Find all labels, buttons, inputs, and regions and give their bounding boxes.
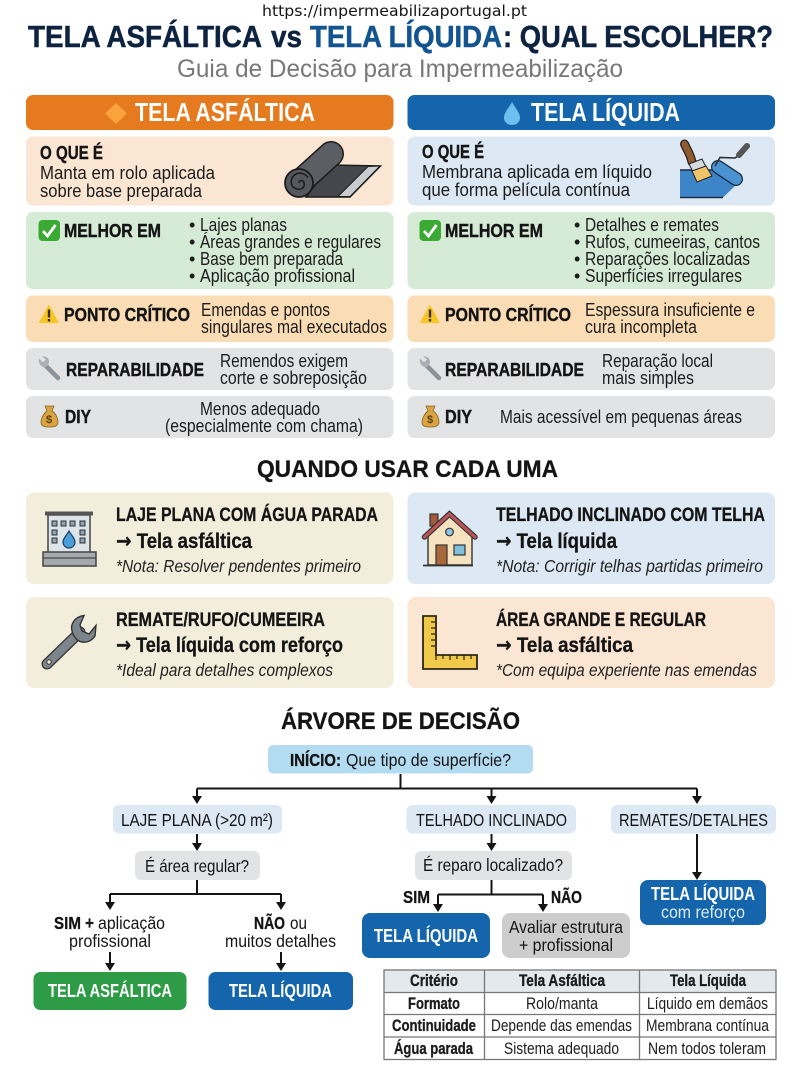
source url: https://impermeabilizaportugal.pt	[262, 2, 527, 20]
label: sim: SIM	[403, 887, 430, 907]
icon: warning	[38, 304, 59, 323]
row: melhor em: Superfícies irregulares	[585, 266, 742, 286]
icon: large wrench	[47, 616, 96, 664]
card: área grande: → Tela asfáltica	[496, 633, 633, 657]
row: melhor em: •	[574, 215, 580, 235]
table header: Tela Líquida	[670, 972, 747, 990]
row: ponto crítico: PONTO CRÍTICO	[445, 304, 571, 325]
title: : QUAL ESCOLHER?	[503, 20, 773, 54]
row: o que é: que forma película contínua	[422, 180, 631, 200]
result: tela asfáltica: TELA ASFÁLTICA	[48, 980, 172, 1001]
arrow: sim to tela asfáltica	[105, 952, 115, 971]
label: sim aplicação profissional: aplicação	[98, 913, 165, 933]
card: remate	[26, 597, 394, 688]
row: o que é: sobre base preparada	[40, 181, 203, 201]
icon: house	[423, 514, 475, 566]
title	[28, 19, 773, 54]
row: melhor em: Base bem preparada	[200, 249, 344, 269]
result: tela líquida repair	[362, 913, 490, 958]
arrow: remates to result	[692, 834, 702, 880]
node: é reparo localizado	[415, 851, 572, 880]
row: diy: (especialmente com chama)	[165, 416, 363, 436]
result: tela líquida com reforço	[640, 880, 766, 925]
card: laje plana: LAJE PLANA COM ÁGUA PARADA	[116, 503, 378, 526]
arrow: telhado to question	[486, 834, 496, 851]
arrow: laje to question	[192, 834, 202, 851]
result: avaliar estrutura: Avaliar estrutura	[509, 917, 623, 937]
row: ponto crítico	[26, 296, 394, 342]
row: reparabilidade	[408, 348, 775, 390]
card: remate: REMATE/RUFO/CUMEEIRA	[116, 609, 325, 631]
icon: building with water drop	[43, 512, 96, 566]
row: ponto crítico	[408, 296, 775, 342]
card: área grande	[408, 597, 775, 688]
card: remate: *Ideal para detalhes complexos	[116, 660, 333, 680]
icon: check	[420, 220, 441, 241]
card: área grande: *Com equipa experiente nas emendas	[496, 660, 757, 680]
row: o que é: O QUE É	[422, 141, 484, 162]
row: ponto crítico: Espessura insuficiente e	[585, 300, 755, 320]
node: início: Que tipo de superfície?	[346, 750, 511, 770]
icon: money bag: $	[427, 414, 433, 426]
row: diy: DIY	[65, 406, 92, 427]
header: tela líquida	[408, 95, 775, 130]
node: início: INÍCIO:	[290, 749, 341, 770]
node: remates: REMATES/DETALHES	[619, 810, 768, 830]
card: área grande: ÁREA GRANDE E REGULAR	[496, 608, 706, 631]
node: telhado inclinado	[406, 805, 576, 834]
row: reparabilidade: corte e sobreposição	[220, 368, 367, 388]
row: melhor em: Lajes planas	[200, 215, 287, 235]
node: início	[268, 745, 533, 774]
row: melhor em: •	[574, 266, 580, 286]
node: laje plana: LAJE PLANA (>20 m²)	[121, 810, 273, 830]
row: melhor em: •	[189, 249, 195, 269]
header: tela asfáltica	[26, 95, 394, 130]
card: telhado inclinado: → Tela líquida	[496, 529, 617, 553]
result: tela líquida repair: TELA LÍQUIDA	[374, 925, 478, 946]
row: melhor em: •	[189, 215, 195, 235]
row: melhor em: Aplicação profissional	[200, 266, 355, 286]
table row: formato: Rolo/manta	[526, 995, 599, 1013]
row: diy	[26, 396, 394, 438]
title: TELA ASFÁLTICA	[28, 19, 262, 54]
card: laje plana: *Nota: Resolver pendentes primeiro	[116, 556, 361, 576]
row: reparabilidade: Reparação local	[602, 351, 713, 371]
row: melhor em: MELHOR EM	[445, 220, 543, 241]
table row: formato: Formato	[408, 995, 460, 1013]
label: não ou muitos detalhes: NÃO	[254, 912, 285, 933]
table row: água parada	[394, 1039, 766, 1058]
label: sim aplicação profissional: SIM +	[54, 913, 94, 933]
card: laje plana: → Tela asfáltica	[116, 529, 252, 553]
row: ponto crítico: Emendas e pontos	[201, 300, 330, 320]
header: tela asfáltica: TELA ASFÁLTICA	[135, 98, 315, 127]
node: é reparo localizado: É reparo localizado?	[423, 855, 563, 875]
table row: continuidade: Depende das emendas	[491, 1017, 632, 1035]
title: vs	[271, 20, 302, 54]
result: tela líquida com reforço: TELA LÍQUIDA	[651, 883, 755, 904]
arrows: área regular branches	[105, 880, 286, 910]
arrows: início to branches	[192, 774, 702, 804]
card: telhado inclinado: *Nota: Corrigir telhas partidas primeiro	[496, 556, 763, 576]
title: TELA LÍQUIDA	[310, 19, 502, 54]
row: reparabilidade: Remendos exigem	[220, 351, 348, 371]
icon: wrench	[420, 356, 439, 378]
row: reparabilidade: REPARABILIDADE	[66, 359, 204, 380]
table row: continuidade: Continuidade	[392, 1017, 476, 1035]
row: diy: DIY	[445, 406, 473, 427]
row: reparabilidade: mais simples	[602, 368, 694, 388]
table header: Critério	[410, 972, 458, 990]
result: tela líquida	[208, 972, 353, 1010]
card: telhado inclinado	[408, 492, 775, 584]
table row: formato: Líquido em demãos	[647, 995, 768, 1013]
table row: formato	[408, 995, 768, 1013]
icon: L ruler	[423, 616, 477, 669]
table row: água parada: Nem todos toleram	[648, 1040, 766, 1058]
table row: continuidade: Membrana contínua	[646, 1017, 770, 1035]
icon: membrane roll	[285, 154, 380, 197]
icon: warning	[420, 304, 440, 323]
label: sim aplicação profissional	[54, 913, 165, 951]
heading: quando usar: QUANDO USAR CADA UMA	[257, 456, 558, 483]
row: reparabilidade	[26, 348, 394, 390]
card: laje plana	[26, 492, 394, 584]
heading: árvore de decisão: ÁRVORE DE DECISÃO	[281, 707, 520, 735]
label: não ou muitos detalhes	[225, 912, 336, 951]
table header: Tela Asfáltica	[519, 972, 606, 990]
row: ponto crítico: cura incompleta	[585, 317, 698, 337]
node: laje plana	[113, 805, 282, 834]
row: o que é	[408, 136, 775, 206]
row: melhor em: •	[189, 266, 195, 286]
row: melhor em: •	[574, 249, 580, 269]
row: melhor em: Áreas grandes e regulares	[200, 232, 381, 252]
header: tela líquida: TELA LÍQUIDA	[531, 98, 680, 127]
node: remates	[611, 805, 776, 834]
label: sim aplicação profissional: profissional	[69, 931, 151, 951]
result: tela asfáltica	[34, 972, 186, 1010]
decision tree	[34, 745, 776, 1010]
result: avaliar estrutura	[502, 913, 630, 958]
arrows: reparo branches	[433, 880, 548, 912]
comparison table	[384, 970, 776, 1060]
node: é área regular	[135, 851, 260, 880]
row: o que é	[26, 136, 394, 206]
result: tela líquida com reforço: com reforço	[661, 902, 745, 922]
result: avaliar estrutura: + profissional	[519, 935, 613, 955]
row: reparabilidade: REPARABILIDADE	[445, 359, 584, 380]
row: diy: Menos adequado	[200, 399, 320, 419]
row: melhor em: Rufos, cumeeiras, cantos	[585, 232, 760, 252]
icon: money bag	[422, 406, 439, 427]
table row: água parada: Sistema adequado	[504, 1040, 619, 1058]
arrow: não to tela líquida	[276, 952, 286, 971]
panel: tela líquida	[408, 95, 775, 438]
card: remate: → Tela líquida com reforço	[116, 633, 343, 657]
row: melhor em	[26, 212, 394, 289]
row: melhor em: •	[189, 232, 195, 252]
icon: check	[38, 220, 60, 241]
row: melhor em: MELHOR EM	[64, 220, 161, 241]
node: é área regular: É área regular?	[145, 856, 249, 876]
subtitle: Guia de Decisão para Impermeabilização	[177, 55, 623, 83]
table row: continuidade	[392, 1017, 770, 1035]
icon: wrench	[39, 356, 58, 378]
label: não ou muitos detalhes: muitos detalhes	[225, 931, 336, 951]
row: diy: Mais acessível em pequenas áreas	[500, 407, 742, 427]
row: o que é: Manta em rolo aplicada	[40, 163, 216, 183]
row: melhor em: Reparações localizadas	[585, 249, 750, 269]
row: melhor em: Detalhes e remates	[585, 215, 719, 235]
icon: brush and roller	[680, 144, 747, 198]
row: melhor em: •	[574, 232, 580, 252]
panel: tela asfáltica	[26, 95, 394, 438]
table header	[410, 972, 747, 990]
row: ponto crítico: singulares mal executados	[201, 317, 387, 337]
label: não: NÃO	[551, 886, 582, 907]
icon: money bag: $	[46, 414, 52, 426]
row: ponto crítico: PONTO CRÍTICO	[64, 304, 190, 325]
row: o que é: Membrana aplicada em líquido	[422, 162, 652, 182]
result: tela líquida: TELA LÍQUIDA	[229, 980, 332, 1001]
label: não ou muitos detalhes: ou	[290, 913, 307, 933]
table row: água parada: Água parada	[394, 1039, 474, 1058]
icon: money bag	[41, 406, 58, 427]
node: telhado inclinado: TELHADO INCLINADO	[416, 810, 567, 830]
row: melhor em	[408, 212, 775, 289]
row: o que é: O QUE É	[40, 142, 103, 163]
row: diy	[408, 396, 775, 438]
